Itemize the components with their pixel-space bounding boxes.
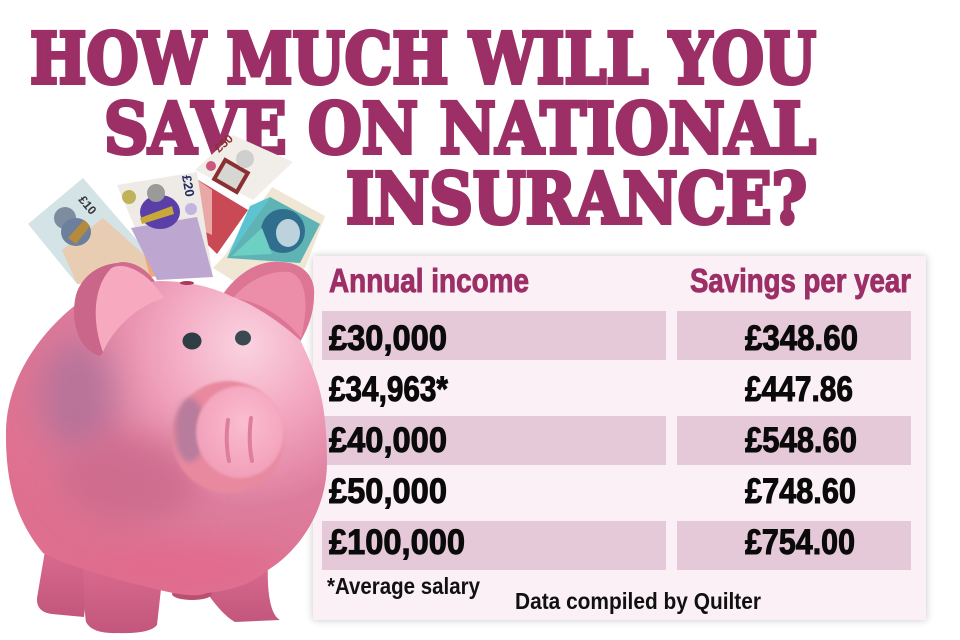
pig: lower rim (150, 552, 270, 574)
title: SAVE ON NATIONAL (104, 87, 816, 170)
pig: body side shade (40, 340, 116, 450)
banknote: fifty pounds: £50 (212, 131, 236, 155)
row 1 (322, 311, 911, 360)
banknote: twenty pounds: £20 (179, 174, 198, 198)
pig: body shading (40, 340, 280, 583)
banknote: red note (178, 178, 248, 254)
pig: back legs (37, 545, 280, 622)
row 2: £34,963* (329, 370, 448, 409)
row 3 (322, 416, 911, 465)
pig: left ear back (75, 262, 166, 355)
banknote: fifty pounds (195, 131, 293, 200)
pig: slot (180, 281, 194, 285)
banknote: ten pounds: £10 (76, 193, 100, 218)
pig: flank shade (60, 435, 200, 525)
pig: eyes (182, 330, 251, 350)
pig: left ear rim (74, 263, 118, 356)
icon: piggy bank (6, 262, 327, 633)
column heading: annual income: Annual income (329, 262, 529, 299)
column heading: savings per year: Savings per year (690, 262, 911, 299)
pig: belly underside (172, 588, 212, 600)
source note: Data compiled by Quilter (515, 588, 761, 614)
banknote: twenty pounds (117, 172, 213, 280)
row 4 (329, 472, 856, 511)
row 1: £30,000 (329, 319, 447, 358)
row 1: £348.60 (745, 319, 858, 358)
row 5: £754.00 (745, 523, 855, 562)
footnote: average salary: *Average salary (327, 573, 480, 599)
pig: snout (172, 381, 284, 493)
row 3: £548.60 (745, 421, 857, 460)
row 2 (329, 370, 853, 409)
icon: banknotes (28, 131, 325, 285)
row 5 (322, 521, 911, 570)
pig: left ear front (92, 266, 164, 352)
panel: savings table (313, 256, 926, 620)
title: HOW MUCH WILL YOU (30, 17, 816, 100)
row 4: £748.60 (745, 472, 856, 511)
row 3: £40,000 (329, 421, 447, 460)
pig: body (6, 281, 327, 595)
banknote: ten pounds (28, 178, 167, 284)
title (30, 17, 816, 240)
row 4: £50,000 (329, 472, 447, 511)
row 5: £100,000 (329, 523, 465, 562)
title: INSURANCE? (346, 157, 807, 240)
banknote: five pounds (213, 187, 325, 285)
pig: front leg (83, 560, 162, 633)
row 2: £447.86 (745, 370, 853, 409)
pig: right ear (223, 262, 314, 342)
